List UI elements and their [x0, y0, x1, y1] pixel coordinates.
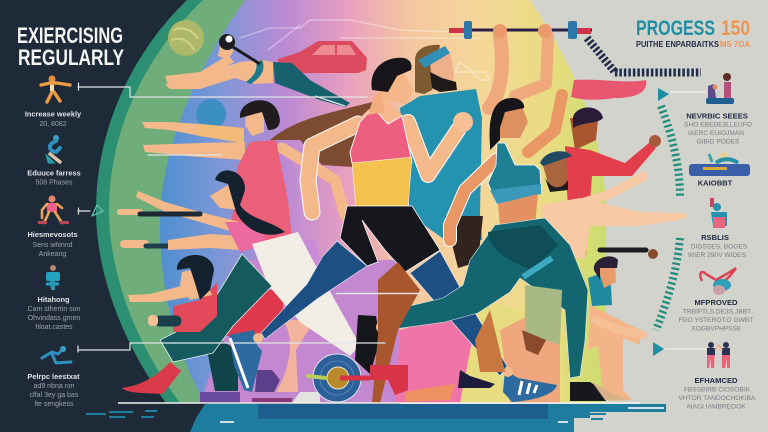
figure: woman in teal top [355, 95, 628, 401]
icon: two people on mat [706, 73, 734, 104]
text: pelrpc leestxat [27, 372, 80, 408]
text: rsblis: WIER 290V WIDES [688, 252, 747, 259]
heading: progress: MS 7OA [720, 39, 750, 49]
text: pelrpc leestxat: clfal 3ey ga bas [30, 392, 79, 399]
text: hitahong: hloat.castes [35, 324, 73, 331]
ground water band [86, 404, 666, 432]
text: hitahong: Cam sthertin son [28, 306, 81, 313]
light right panel [400, 0, 768, 432]
figure: man in pink and yellow top [229, 58, 557, 402]
connector arrows left [78, 83, 421, 352]
icon: teal lying figure [42, 346, 71, 363]
white pants [252, 232, 360, 356]
heading: progress: 150 [721, 17, 750, 40]
dashed teal curve lower [656, 238, 680, 330]
text: enhanced [679, 376, 756, 410]
text: mfproved: XOGBVPHPSS8 [691, 326, 741, 332]
icon: two women [707, 342, 730, 368]
text: hitahong [28, 295, 81, 331]
text: mfproved: MFPROVED [694, 298, 738, 307]
illustration: brown runner silhouette [270, 102, 372, 167]
text: enhanced: EFHAMCED [694, 376, 738, 385]
arrow: lower triangle [653, 342, 706, 356]
figure: woman in pink tank [142, 100, 345, 240]
text: increase weekly: 20, 8082 [39, 121, 67, 128]
figure: swimming woman [165, 34, 350, 107]
text: educe fairess: 508 Phases [36, 180, 73, 186]
text: pelrpc leestxat: ad9 nbna nm [34, 383, 75, 390]
illustration: weight plate [308, 354, 370, 402]
ground line [118, 402, 640, 404]
icon: band and heart [700, 268, 736, 295]
heading: progress: PUITHE ENPARBAITKS [636, 39, 719, 49]
icon: teal seated figure [46, 265, 60, 290]
text: rsblis: RSBLIS [701, 233, 729, 242]
text: rsblis [688, 233, 748, 259]
dark left panel [0, 0, 400, 432]
text: mfproved [679, 298, 753, 332]
icon: pink figure [38, 196, 69, 224]
text: increase weekly [25, 110, 82, 128]
text: neurbic seees [684, 112, 752, 146]
text: pelrpc leestxat: lte sengkess [35, 401, 74, 408]
text: hiesmevosots [27, 230, 78, 258]
text: educe fairess [27, 168, 81, 186]
figure: woman with ponytail, arms forward [120, 170, 360, 356]
text: educe fairess: Eduuce farress [27, 168, 81, 178]
icon: green ball [168, 20, 204, 56]
text: enhanced: FBSSBIRB CIOSOBIK [684, 386, 751, 394]
text: hiesmevosots: Hiesmevosots [27, 230, 78, 239]
dashed teal curve upper [661, 106, 680, 197]
figure: man with cap, tan shirt [540, 151, 685, 260]
figure: teal-legged woman's leg and red shoe [122, 254, 272, 394]
black shorts and blue leggings [340, 206, 440, 272]
text: neurbic seees: SHO EBEDE3LLEUFO [684, 122, 752, 128]
arrow: upper triangle [658, 88, 706, 101]
text: neurbic seees: NEVRBIC SEEES [686, 112, 748, 120]
figure: crouching woman, red shirt [128, 255, 217, 332]
text: neurbic seees: GIBID PODES [697, 138, 740, 146]
dashed navy connector [587, 38, 701, 72]
text: increase weekly: Increase weekly [25, 110, 82, 118]
black trainers right foot [570, 382, 612, 401]
text: mfproved: TRBIFTLS.DE3S.JBBT [683, 308, 751, 316]
title [17, 23, 124, 70]
text: kaiobbt: KAIOBBT [698, 178, 733, 188]
text: neurbic seees: IAERC EUIOJMAN [688, 130, 744, 137]
barbell [449, 21, 592, 39]
background streaks [240, 20, 490, 80]
text: hiesmevosots: Sens whinnd [32, 242, 73, 249]
heading: progress: PROGESS [636, 17, 715, 40]
icon: seated figure [710, 198, 727, 228]
lower pink and purple backdrop patches [200, 260, 400, 403]
text: mfproved: FDO YSTEROT.O GWBT [679, 317, 753, 324]
text: rsblis: DIGSSES, BOGES [691, 244, 748, 250]
icon: blue ball [196, 99, 226, 129]
icon: orange stretching figure [41, 76, 70, 102]
text: enhanced: VHTOR TANDOCHOKIBA [679, 395, 756, 402]
olive shorts and knee [522, 285, 562, 355]
figure: man in red shirt [565, 80, 661, 255]
backdrop circle with rainbow gradient [96, 0, 606, 403]
lower background legs and shapes [370, 262, 505, 403]
shoe left [229, 330, 262, 392]
title: REGULARLY [18, 45, 124, 70]
illustration: red car [278, 41, 367, 73]
text: enhanced: AIAGI IAMBREOOK [686, 404, 746, 410]
black shoe back foot [355, 315, 380, 374]
text: hiesmevosots: Ankeang [39, 251, 66, 258]
title: EXIERCISING [17, 23, 123, 48]
text: hitahong: Ohvindass gmen [28, 315, 80, 322]
icon: teal squatting figure [48, 135, 60, 162]
heading: progress [636, 17, 750, 49]
figure: seated boy [588, 249, 658, 401]
text: pelrpc leestxat: Pelrpc leestxat [27, 372, 80, 381]
text: hitahong: Hitahong [37, 295, 70, 304]
icon: blue mat with figures [689, 152, 750, 176]
figure: man in blue shirt with headband [400, 24, 552, 268]
